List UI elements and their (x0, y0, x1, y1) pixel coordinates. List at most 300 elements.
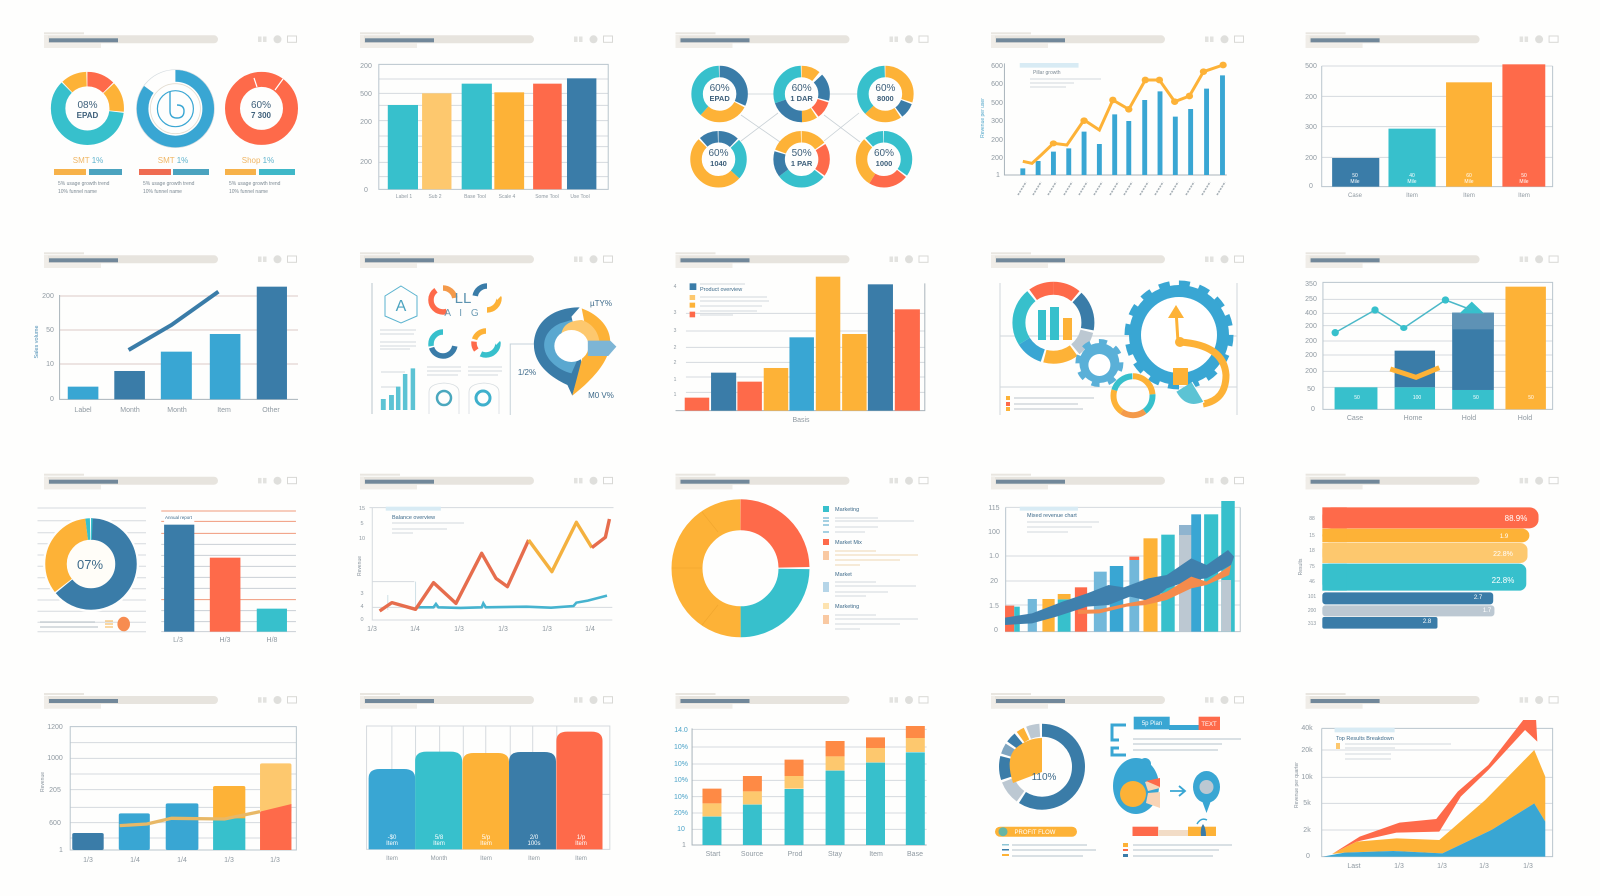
donut label: 7 300 (251, 111, 272, 120)
axis labels: 200 (1305, 338, 1317, 345)
pill and colour bar: PROFIT FLOW (1015, 830, 1056, 836)
axis labels: 10k (1301, 774, 1313, 781)
legend group 3 (823, 572, 916, 596)
columns and line (70, 727, 296, 850)
axis labels: 1/3 (367, 626, 377, 633)
areas and axes (1322, 720, 1553, 857)
bar and axis labels: 2.7 (1474, 595, 1483, 601)
bar and axis labels: 22.8% (1493, 551, 1513, 558)
labels: -$0 (388, 835, 396, 841)
axis labels: 200 (1305, 323, 1317, 330)
axis labels: 100 (1413, 395, 1421, 401)
stat block 3: 5% usage growth trend (229, 181, 281, 187)
axis labels: Other (262, 407, 280, 414)
legend (1027, 513, 1099, 532)
stat block 2: SMT 1% (158, 156, 188, 165)
labels: Item (386, 841, 398, 847)
header bar (360, 474, 612, 489)
axis labels: Case (1348, 193, 1363, 199)
axis labels: 200 (360, 119, 372, 126)
axis labels: Case (1347, 415, 1363, 422)
donut 1 (697, 72, 742, 116)
panel: mixed stacked columns (40, 693, 296, 864)
labels: 1/p (577, 835, 585, 841)
icon: lower rings (429, 383, 499, 414)
axis labels: 2 (674, 360, 677, 366)
donut (1006, 730, 1078, 803)
labels: 2/0 (530, 835, 538, 841)
header bar (1306, 693, 1558, 709)
icon: large gear with clock (1128, 284, 1230, 404)
labels: 100s (527, 841, 541, 847)
header bar (676, 474, 928, 489)
legend: Mixed revenue chart (1027, 513, 1077, 519)
axis labels: 3 (674, 310, 677, 316)
donut 6 (862, 137, 906, 182)
axis labels: Hold (1462, 415, 1476, 422)
axis labels: Revenue (40, 772, 46, 792)
axis labels: Hold (1518, 415, 1532, 422)
axis labels: 1 (59, 847, 63, 854)
donut 3 label: 8000 (877, 94, 894, 103)
axis labels: 10% (674, 777, 688, 784)
axis labels: Mile (1464, 179, 1474, 185)
donut 1 label: 60% (710, 83, 730, 94)
legend (392, 515, 464, 533)
stacks (692, 726, 927, 845)
stat block 1 (54, 156, 122, 195)
labels: 5/p (482, 835, 490, 841)
labels: 5/8 (435, 835, 443, 841)
axis labels: 200 (991, 155, 1003, 162)
legend group 1: Marketing (835, 507, 859, 513)
bar labels (165, 515, 278, 644)
axis labels: 2 (674, 345, 677, 351)
axis labels: Stay (828, 851, 842, 858)
axis labels: 600 (49, 820, 61, 827)
labels: Item (480, 841, 492, 847)
axis labels: 200 (1305, 94, 1317, 101)
panel: stacked columns (674, 693, 928, 858)
axis labels: 205 (49, 787, 61, 794)
legend group 1 (823, 506, 914, 532)
axis labels: 3 (360, 591, 364, 597)
axis labels: Base Tool (464, 194, 486, 200)
panel: bars with trend line (980, 32, 1244, 195)
pin value labels (518, 299, 614, 400)
axis labels: 10 (46, 361, 54, 368)
icon text: A I G (444, 308, 482, 319)
axis labels: 200 (42, 293, 54, 300)
header bar (676, 32, 928, 48)
axis labels: 1/3 (498, 626, 508, 633)
axis labels: 0 (364, 187, 368, 194)
axis labels (674, 727, 923, 858)
axis labels (34, 293, 280, 414)
donut 1 label: EPAD (709, 94, 730, 103)
axis labels: 200 (1305, 155, 1317, 162)
axis labels: 10 (359, 536, 365, 542)
axis labels: 1/3 (224, 857, 234, 864)
axis labels: 1/3 (1437, 863, 1447, 870)
bars and bands (1005, 501, 1240, 632)
axis labels: 5 (360, 521, 364, 527)
icon: hexagon badge: A (396, 298, 407, 315)
large donut (672, 512, 794, 625)
lines and axes (369, 507, 614, 620)
bar and axis labels: 22.8% (1492, 576, 1514, 585)
axis labels: 50 (1352, 173, 1358, 179)
axis labels: Item (1463, 193, 1475, 199)
legend (1030, 70, 1101, 87)
donut: 07% (77, 557, 103, 572)
axis labels: Label (74, 407, 92, 414)
axis labels: 10% (674, 794, 688, 801)
header bar (360, 693, 612, 709)
bars and axes (676, 277, 925, 411)
donut: red (232, 78, 290, 137)
donut label: 08% (77, 100, 98, 111)
stat block 2 (139, 156, 209, 195)
axis labels: 200 (991, 137, 1003, 144)
icon: yellow and teal ring (474, 331, 498, 355)
axis labels: Some Tool (535, 194, 559, 200)
connector lines (741, 94, 860, 142)
donut 5 (779, 137, 824, 182)
stat block 3 (225, 156, 295, 195)
axis labels (1305, 281, 1534, 422)
axis labels: Month (167, 407, 187, 414)
axis labels: 0 (50, 396, 54, 403)
donut 2 (779, 72, 824, 116)
axis labels: Item (869, 851, 883, 858)
note with orange dot (40, 617, 130, 631)
bar and axis labels: 200 (1308, 608, 1316, 614)
axis labels: 1/3 (1523, 863, 1533, 870)
axis labels: Source (741, 851, 763, 858)
panel: multicolour bars with legend (674, 252, 928, 424)
axis labels: 1.0 (989, 553, 999, 560)
axis labels: 0 (994, 627, 998, 634)
axis labels: 20% (674, 810, 688, 817)
axis labels: 1/3 (454, 626, 464, 633)
blob and arrow to pin (1113, 758, 1220, 814)
donut 6 label: 1000 (876, 159, 892, 168)
flow header (1112, 717, 1241, 755)
bar and axis labels: 88 (1309, 516, 1315, 522)
columns (367, 726, 610, 849)
panel: donut and three bars (38, 474, 296, 644)
legend: Top Results Breakdown (1336, 736, 1394, 742)
header bar (44, 32, 296, 48)
axis labels: 200 (360, 159, 372, 166)
labels: Item (480, 856, 492, 862)
donut 4 label: 60% (708, 148, 729, 159)
axis labels: Scale 4 (499, 194, 516, 200)
stat block 3: 10% funnel name (229, 189, 268, 195)
axis labels: 1/4 (585, 626, 595, 633)
axis labels: 600 (991, 81, 1003, 88)
left grid lines (38, 508, 146, 632)
panel: four rising bars (1305, 32, 1558, 199)
stat block 3: Shop 1% (242, 156, 274, 165)
header bar (44, 693, 296, 709)
axis labels: 500 (1305, 63, 1317, 70)
axis labels: 15 (359, 506, 365, 512)
axis labels (674, 284, 810, 424)
panel: horizontal bars (1298, 474, 1558, 629)
legend group 4: Marketing (835, 604, 859, 610)
axis labels: 1/3 (542, 626, 552, 633)
small ring (1114, 376, 1152, 415)
donut 5 label: 1 PAR (791, 159, 813, 168)
axis labels: Item (217, 407, 231, 414)
axis frame (1000, 283, 1237, 415)
panel: two line chart (357, 474, 614, 633)
stat block 1: 10% funnel name (58, 189, 97, 195)
bars, grid and line (1323, 282, 1553, 409)
pin value labels: 1/2% (518, 368, 536, 377)
panel: rounded five-column chart (360, 693, 612, 862)
donut 4 (696, 137, 741, 182)
axis labels: Revenue (357, 556, 363, 576)
axis labels: 20 (990, 578, 998, 585)
bar labels: Annual report (165, 515, 193, 520)
axis labels: 300 (991, 118, 1003, 125)
axis labels: 250 (1305, 296, 1317, 303)
axis labels (360, 63, 590, 200)
axis labels: 1/4 (410, 626, 420, 633)
flow header: TEXT (1201, 722, 1217, 728)
axis labels: Mile (1350, 179, 1360, 185)
axis labels: 50 (46, 327, 54, 334)
axis labels: Base (907, 851, 923, 858)
legend group 3: Market (835, 572, 852, 578)
panel: blue bars with diagonal line (34, 252, 298, 414)
axis labels: Label 1 (396, 194, 412, 200)
panel: large donut with legend (672, 474, 928, 629)
bars and axes (1322, 64, 1553, 187)
donut 2 label: 60% (792, 83, 812, 94)
bar and axis labels: 101 (1308, 594, 1316, 600)
axis labels (1305, 63, 1530, 199)
bar and axis labels: 88.9% (1505, 514, 1527, 523)
axis labels: 50 (1307, 386, 1315, 393)
panel: six linked donuts (676, 32, 928, 182)
panel: bars with overlapping bands (988, 474, 1244, 634)
axis labels (980, 63, 1225, 195)
panel: gears and ring (991, 252, 1244, 415)
labels (386, 835, 587, 862)
axis labels: 1/3 (1479, 863, 1489, 870)
bar and axis labels: 18 (1309, 548, 1315, 554)
axis labels: 1 (674, 392, 677, 398)
header bar (360, 252, 612, 268)
axis labels: 50 (1354, 395, 1360, 401)
legend (1006, 396, 1094, 411)
axis labels: Sales volume (34, 325, 40, 359)
axis labels: 0 (1306, 853, 1310, 860)
axis labels: 300 (1305, 124, 1317, 131)
header bar (676, 693, 928, 709)
axis labels: 14.0 (674, 727, 688, 734)
panel: donut with flow icons (991, 693, 1244, 857)
donut 6 label: 60% (874, 148, 894, 159)
panel: stacked bars with line (1305, 252, 1558, 422)
axis labels: 1 (674, 377, 677, 383)
bar and axis labels: 2.8 (1423, 619, 1432, 625)
axis labels: 10% (674, 761, 688, 768)
donut (43, 516, 139, 612)
ring with bars (1019, 288, 1088, 357)
axis labels: 10% (674, 744, 688, 751)
axis labels: Item (1406, 193, 1418, 199)
panel: three donut gauges (44, 32, 296, 195)
axis labels: 1000 (47, 755, 63, 762)
axis labels: 50 (1521, 173, 1527, 179)
icon: teal and dark ring (431, 332, 455, 356)
axis labels: Use Tool (570, 194, 590, 200)
axis labels: Mile (1519, 179, 1529, 185)
axis labels: 3 (674, 328, 677, 334)
header bar (44, 252, 296, 268)
axis labels (357, 506, 595, 633)
axis labels: 0 (1311, 406, 1315, 413)
axis labels: Mile (1407, 179, 1417, 185)
axis labels: Prod (788, 851, 802, 858)
bar and axis labels: 15 (1309, 533, 1315, 539)
axis labels: 350 (1305, 281, 1317, 288)
axis labels: 0 (1309, 183, 1313, 190)
axis line (371, 283, 373, 414)
stat block 2: 10% funnel name (143, 189, 182, 195)
axis labels: 200 (1305, 368, 1317, 375)
panel: stacked area chart (1294, 693, 1558, 870)
axis labels: 50 (1473, 395, 1479, 401)
axis labels: 100 (988, 529, 1000, 536)
axis labels: 1200 (47, 724, 63, 731)
donut: teal, orange and red (58, 79, 117, 138)
stat block 1: SMT 1% (73, 156, 103, 165)
labels: Month (431, 856, 447, 862)
header bar (991, 693, 1244, 709)
labels: Item (575, 856, 587, 862)
axis labels: Month (120, 407, 140, 414)
mini bar chart (381, 368, 415, 410)
labels: Item (528, 856, 540, 862)
axis labels: 10 (677, 826, 685, 833)
bar chart (161, 511, 296, 632)
bar and axis labels: Results (1298, 558, 1304, 575)
legend: Pillar growth (1033, 70, 1061, 76)
axis labels: Home (1404, 415, 1422, 422)
icon: dark ring (475, 286, 499, 310)
gauge: blue ring with clock icon (136, 70, 214, 148)
bar and axis labels: 46 (1309, 579, 1315, 585)
legend text: Product overview (700, 287, 742, 293)
bar and axis labels: 1.7 (1483, 608, 1492, 614)
bar labels: L/3 (173, 637, 183, 644)
donut: 110% (1032, 772, 1057, 783)
header bar (991, 252, 1244, 268)
axis labels: 4 (674, 284, 677, 290)
bars (1322, 507, 1539, 629)
labels: Item (433, 841, 445, 847)
axis labels: 1/3 (270, 857, 280, 864)
bar and axis labels: 313 (1308, 621, 1316, 627)
header bar (676, 252, 928, 268)
labels: Item (575, 841, 587, 847)
bar labels: H/8 (267, 637, 278, 644)
header bar (44, 474, 296, 489)
axis labels: 40 (1409, 173, 1415, 179)
bars and axes (379, 64, 608, 189)
donut 4 label: 1040 (710, 159, 727, 168)
legend group 2: Market Mix (835, 540, 862, 546)
bars and trend line (1004, 62, 1227, 175)
legend text (700, 284, 769, 315)
stat block 1: 5% usage growth trend (58, 181, 110, 187)
axis labels: 1.5 (989, 603, 999, 610)
header bar (1306, 474, 1558, 489)
donut 5 label: 50% (792, 148, 812, 159)
bars and line (60, 287, 298, 399)
header bar (991, 474, 1244, 489)
axis labels (988, 505, 1000, 634)
axis labels: 2k (1303, 827, 1311, 834)
pin diagram (510, 307, 616, 415)
axis labels (40, 724, 280, 864)
axis labels: 200 (1305, 352, 1317, 359)
axis labels: 0 (360, 617, 364, 623)
header bar (360, 32, 612, 48)
axis labels: Item (1518, 193, 1530, 199)
axis labels: Revenue per user (980, 98, 986, 138)
axis labels: 50 (1528, 395, 1534, 401)
notes (1002, 843, 1232, 857)
icon: small gear (1078, 342, 1120, 384)
axis labels (1294, 725, 1533, 870)
bar and axis labels (1298, 514, 1527, 627)
axis labels: 500 (360, 91, 372, 98)
axis labels: 200 (360, 63, 372, 70)
axis labels: 1/4 (177, 857, 187, 864)
axis labels: 40k (1301, 725, 1313, 732)
axis labels: 115 (988, 505, 1000, 512)
pin value labels: M0 V% (588, 391, 614, 400)
flow header: 5p Plan (1142, 721, 1162, 727)
header bar (991, 32, 1244, 48)
legend (1336, 736, 1451, 759)
icon: red and yellow ring (431, 288, 455, 312)
icon: hexagon badge (385, 286, 417, 323)
header bar (1306, 252, 1558, 268)
axis labels: 4 (360, 604, 364, 610)
axis labels: 600 (991, 63, 1003, 70)
labels: Item (386, 856, 398, 862)
axis labels: 500 (991, 100, 1003, 107)
stat block 2: 5% usage growth trend (143, 181, 195, 187)
text lines (380, 330, 502, 387)
bar and axis labels: 75 (1309, 564, 1315, 570)
legend: Balance overview (392, 515, 435, 521)
axis labels: Revenue per quarter (1294, 762, 1300, 808)
axis labels: 1 (996, 172, 1000, 179)
bar labels: H/3 (220, 637, 231, 644)
pin value labels: µTY% (590, 299, 612, 308)
axis labels: Sub 2 (428, 194, 442, 200)
axis labels: 1/4 (130, 857, 140, 864)
